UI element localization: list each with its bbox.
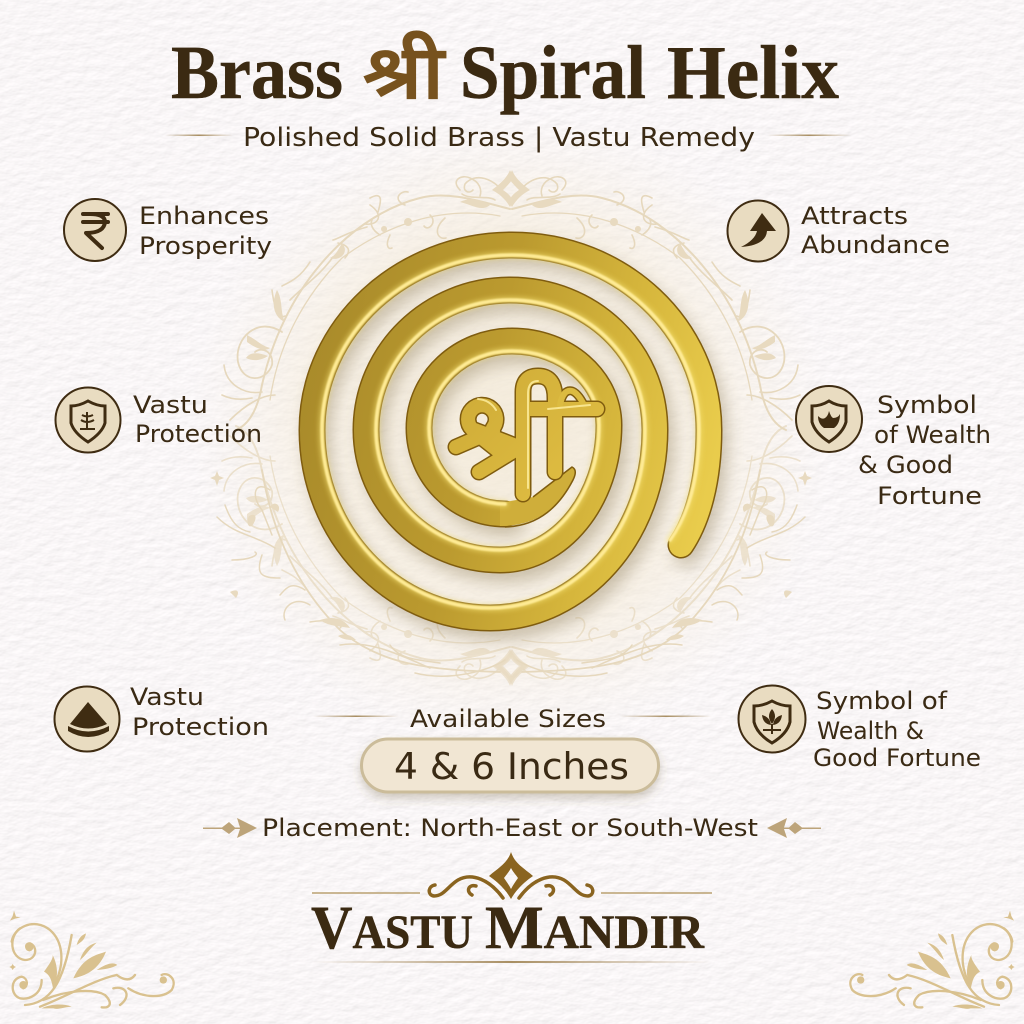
feature: enhances prosperity: Enhances xyxy=(139,202,269,230)
title: Helix xyxy=(667,31,839,115)
feature: symbol of wealth lower: Wealth & xyxy=(817,717,924,745)
feature: symbol of wealth lower: Symbol of xyxy=(816,687,948,715)
shri emblem in brass xyxy=(456,376,597,494)
feature: enhances prosperity xyxy=(64,199,272,261)
size pill xyxy=(362,739,658,792)
title xyxy=(171,30,839,115)
feature: symbol of wealth upper: & Good xyxy=(858,451,953,479)
icon: rising arrow xyxy=(728,200,788,262)
feature: vastu protection upper: Vastu xyxy=(133,391,208,419)
ornament: left arrow xyxy=(203,818,257,838)
feature: attracts abundance: Attracts xyxy=(801,202,908,230)
brand logo xyxy=(311,852,712,963)
brand logo: MANDIR xyxy=(485,895,705,962)
feature: vastu protection lower xyxy=(54,683,269,752)
size pill: 4 & 6 Inches xyxy=(394,745,629,788)
subtitle: Polished Solid Brass | Vastu Remedy xyxy=(243,123,755,153)
corner flourish right xyxy=(850,911,1015,1009)
icon: shield with flame xyxy=(796,386,862,452)
icon: pyramid xyxy=(54,686,120,752)
feature: vastu protection upper xyxy=(56,388,262,452)
feature: enhances prosperity: Prosperity xyxy=(139,232,272,260)
feature: symbol of wealth lower xyxy=(738,686,981,772)
corner flourish left xyxy=(9,911,174,1009)
feature: symbol of wealth upper xyxy=(796,386,991,510)
title: Spiral xyxy=(460,31,646,115)
brass spiral xyxy=(312,245,715,627)
icon: rupee xyxy=(64,199,126,261)
icon: shield with tree xyxy=(56,388,120,452)
mandala ornament xyxy=(210,170,812,686)
feature: attracts abundance xyxy=(728,200,950,262)
glow behind spiral xyxy=(191,110,831,750)
available sizes label: Available Sizes xyxy=(410,705,606,733)
title: Brass xyxy=(171,31,343,115)
feature: symbol of wealth lower: Good Fortune xyxy=(813,744,981,772)
tapered inner tail xyxy=(500,467,575,527)
brand logo: VASTU xyxy=(311,895,473,962)
feature: symbol of wealth upper: Fortune xyxy=(877,482,982,510)
feature: vastu protection lower: Protection xyxy=(132,713,269,741)
placement line: Placement: North-East or South-West xyxy=(262,814,758,842)
feature: vastu protection lower: Vastu xyxy=(130,683,204,711)
feature: symbol of wealth upper: of Wealth xyxy=(874,421,991,449)
feature: vastu protection upper: Protection xyxy=(135,420,262,448)
ornament: right arrow xyxy=(767,818,821,838)
feature: symbol of wealth upper: Symbol xyxy=(877,391,977,419)
title: श्री xyxy=(363,30,447,115)
icon: shield with plant xyxy=(738,686,806,752)
crest ornament xyxy=(429,852,593,899)
feature: attracts abundance: Abundance xyxy=(801,231,950,259)
